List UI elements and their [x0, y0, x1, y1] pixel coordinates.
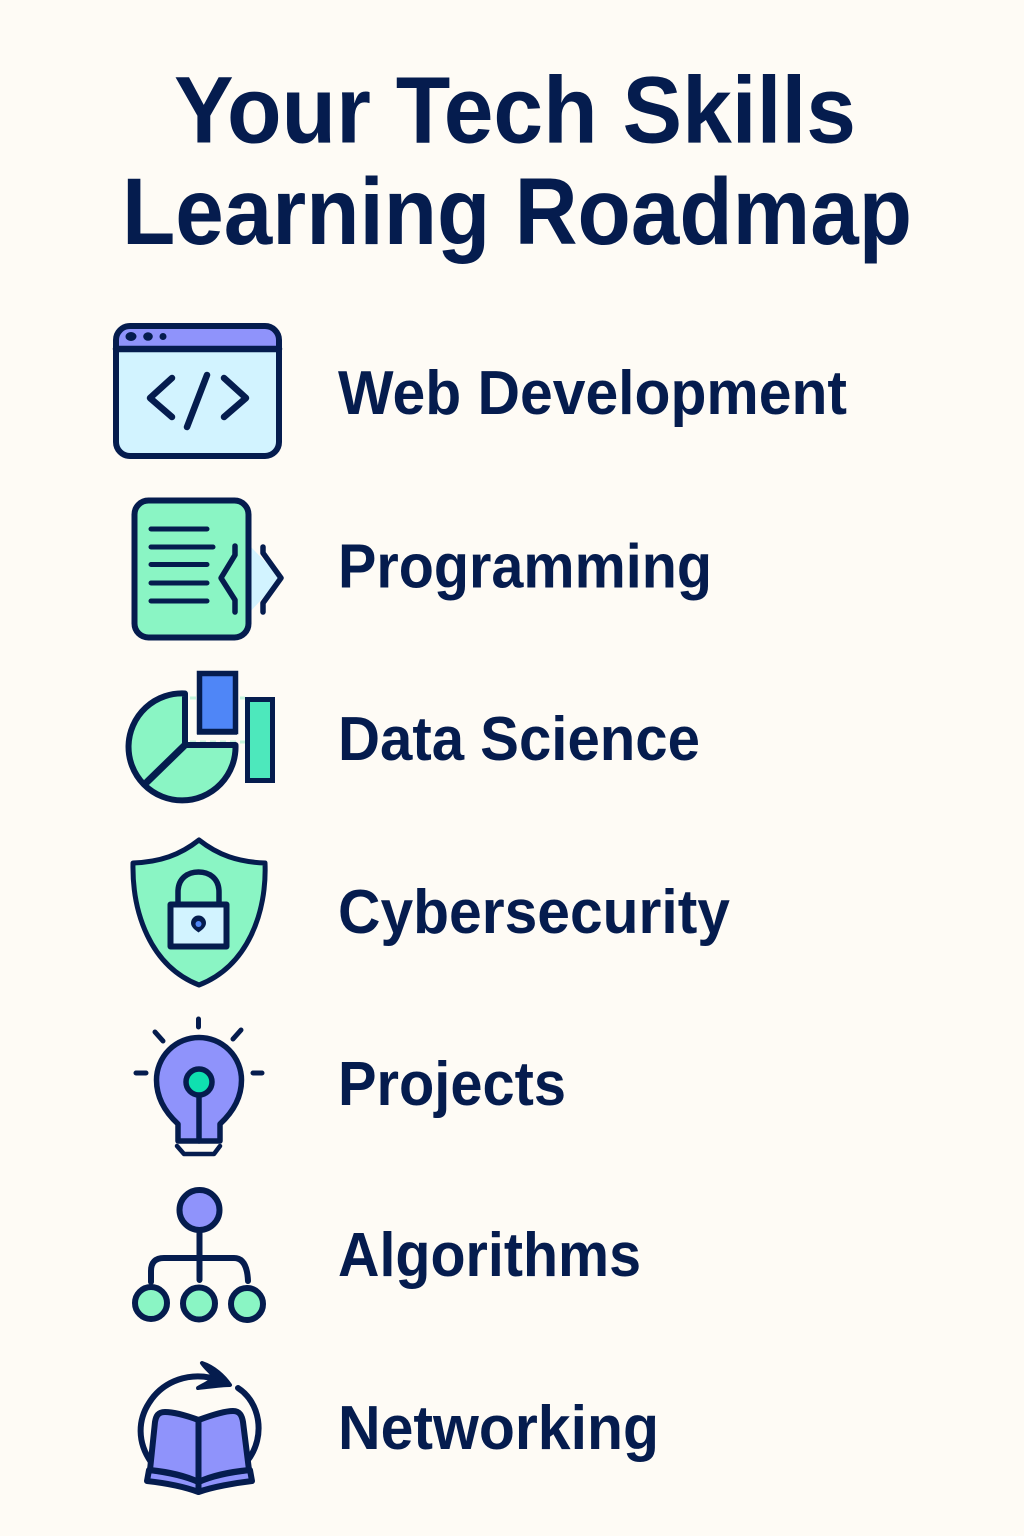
- icon: security shield with lock: [133, 840, 265, 985]
- label: Web Development: Web Development: [338, 359, 847, 428]
- title: Learning Roadmap: [122, 159, 912, 265]
- icon: light bulb: [136, 1019, 262, 1154]
- icon: web browser with code: [116, 326, 279, 456]
- icon: pie chart and bars: [129, 674, 272, 800]
- icon: algorithm tree: [135, 1190, 263, 1320]
- label: Data Science: Data Science: [338, 705, 700, 774]
- title: [122, 58, 912, 265]
- label: Cybersecurity: Cybersecurity: [338, 878, 730, 947]
- title: Your Tech Skills: [174, 58, 856, 164]
- label: Algorithms: Algorithms: [338, 1221, 641, 1290]
- icon: open book with circular arrow: [141, 1363, 259, 1492]
- label: Networking: Networking: [338, 1394, 659, 1463]
- label: Projects: Projects: [338, 1050, 566, 1119]
- icon: code document: [134, 500, 281, 638]
- label: Programming: Programming: [338, 532, 712, 602]
